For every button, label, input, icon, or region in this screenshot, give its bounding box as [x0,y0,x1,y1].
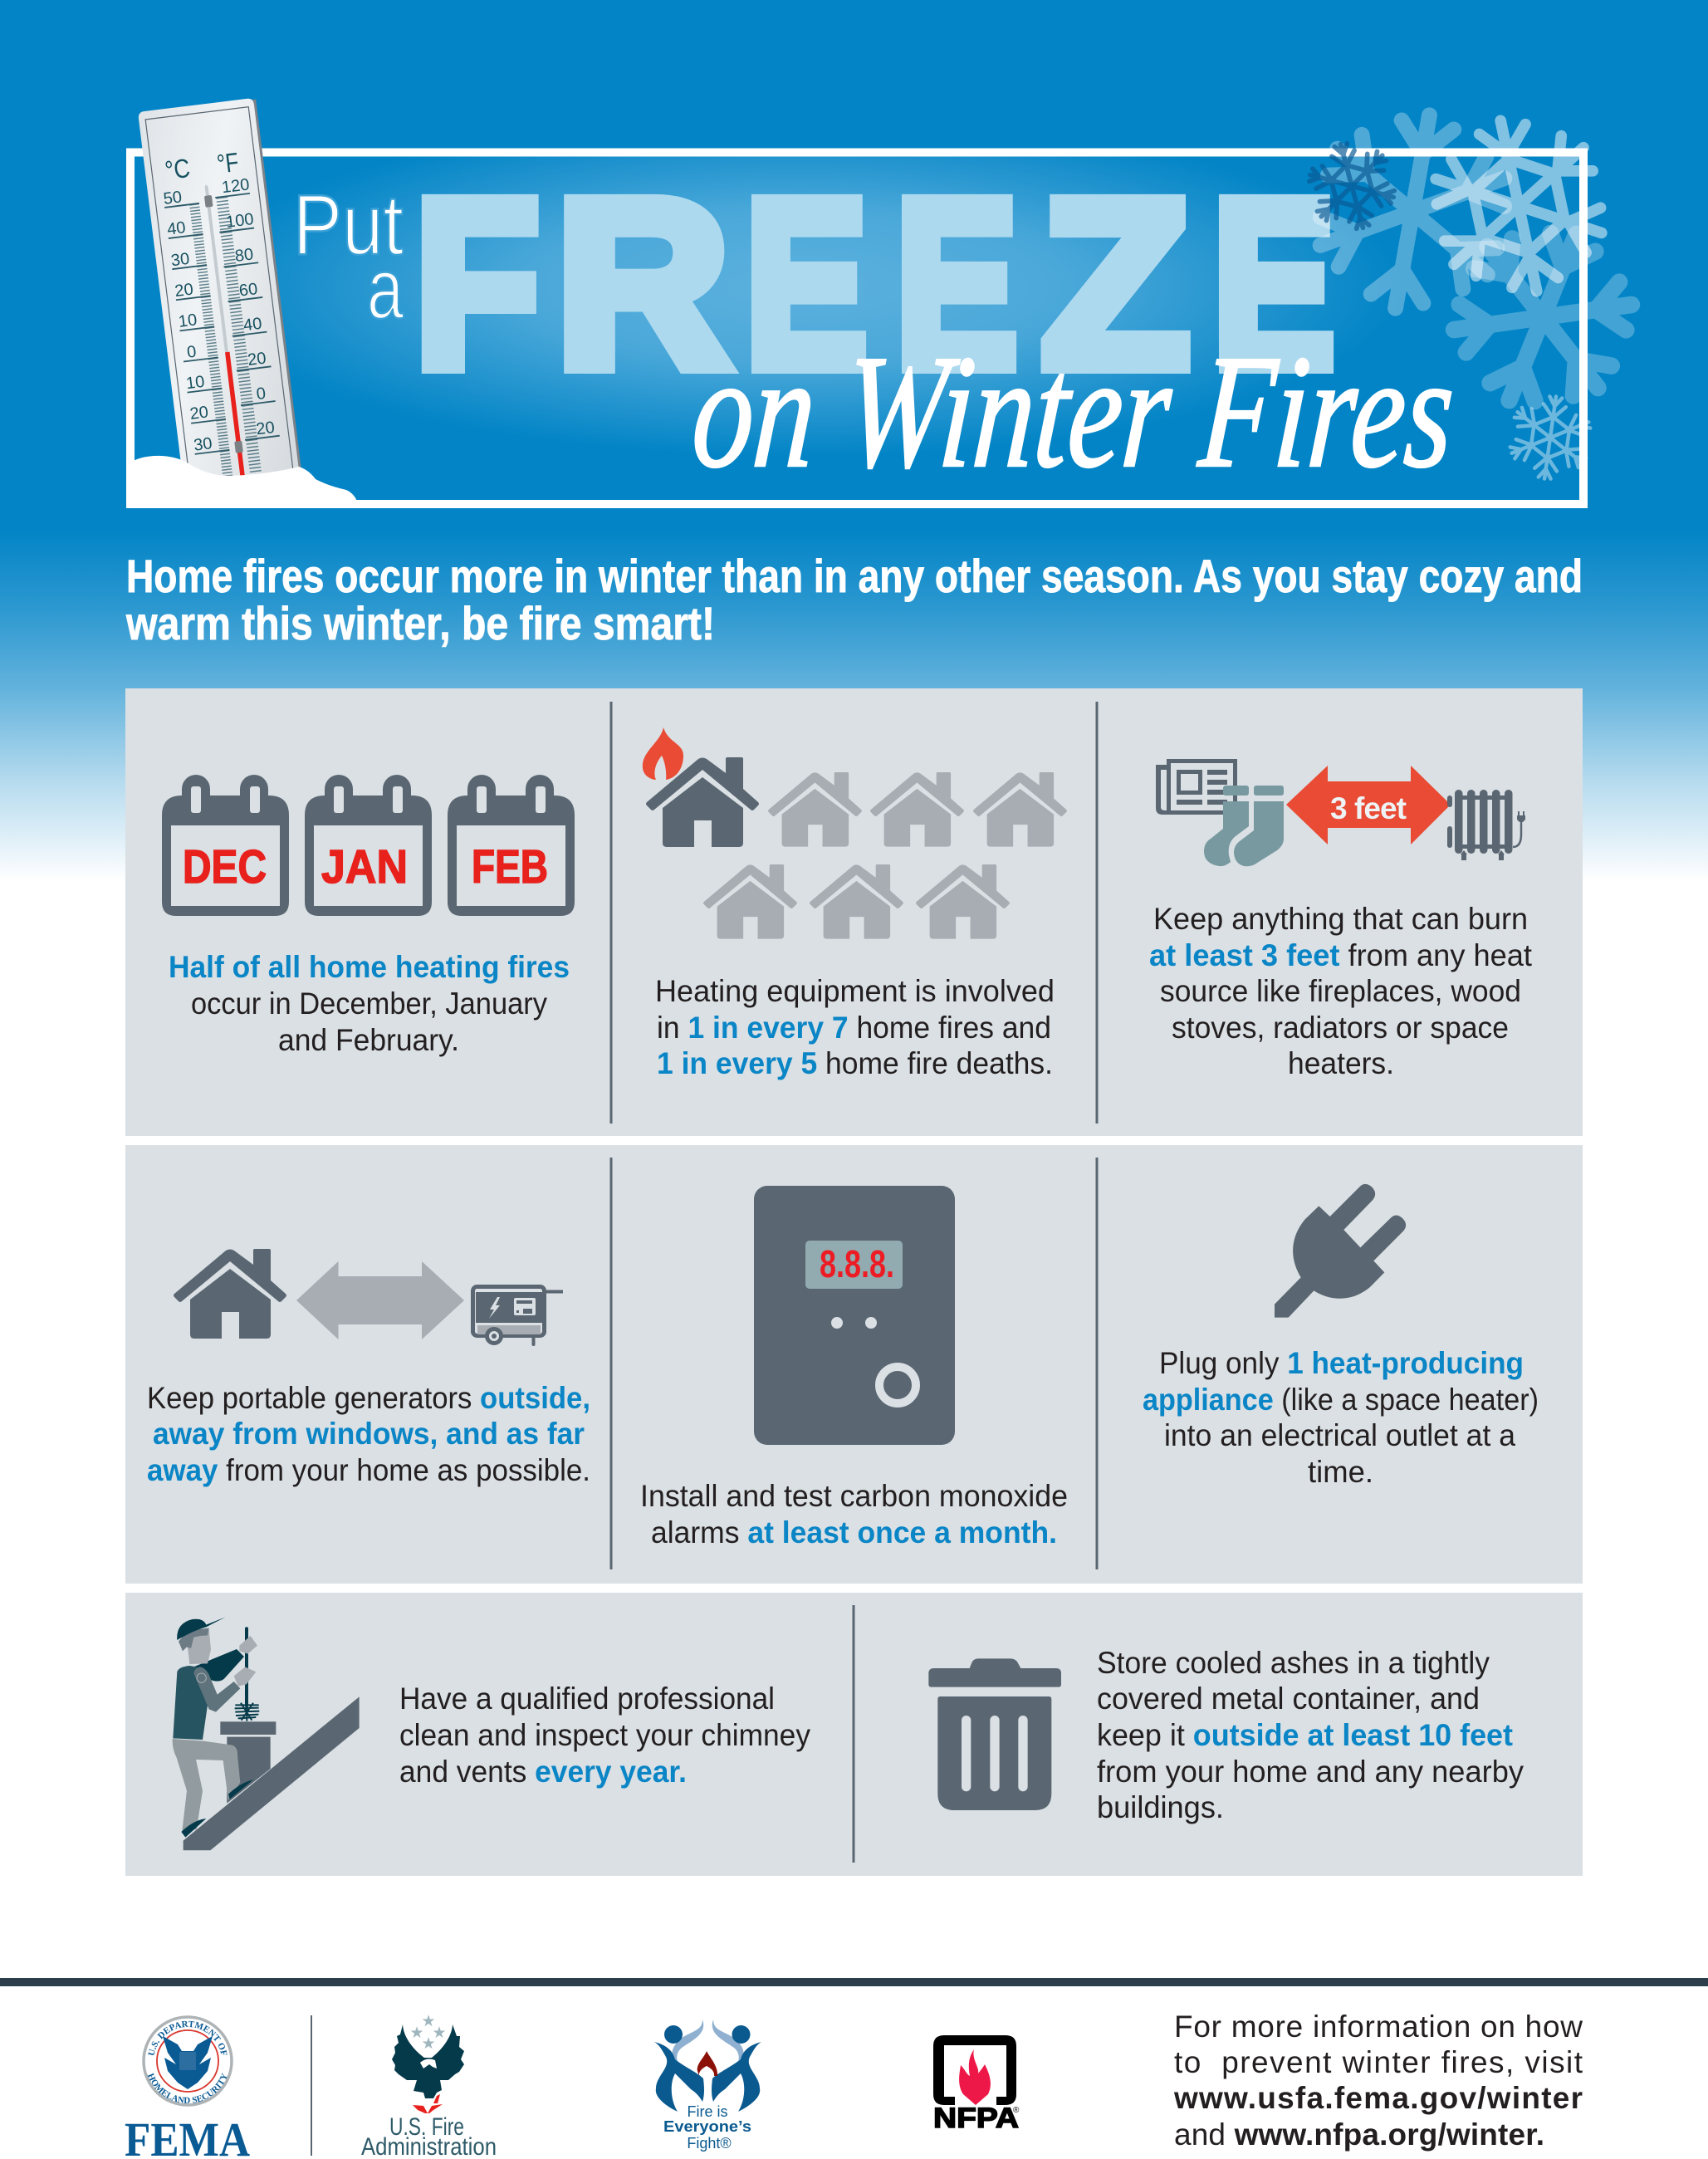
thermometer: 20 [188,403,209,423]
logo: FEMA: U.S. DEPARTMENT OF [148,2021,228,2055]
text: keep 3 feet: heaters. [1288,1046,1394,1080]
icon: carbon monoxide alarm: 8.8.8. [820,1242,894,1285]
logo: FEMA: HOMELAND SECURITY [148,2073,228,2103]
icon: generator [473,1287,563,1346]
thermometer: 10 [178,311,198,331]
thermometer: 0 [186,343,198,362]
text: ashes: buildings. [1097,1790,1224,1824]
thermometer: 120 [221,175,251,197]
banner frame [130,153,1583,504]
logo: U.S. Fire Administration: ★ [421,2013,436,2030]
thermometer: 10 [185,373,206,393]
text: chimney [399,1682,810,1789]
text: more information: and www.nfpa.org/winter. [1174,2117,1544,2152]
text: keep 3 feet: Keep anything that can burn [1153,902,1528,936]
logo: Fire is Everyone's Fight: Fight® [687,2135,732,2152]
icon: chimney sweep [173,1617,360,1850]
icon: calendars: FEB [472,840,548,893]
icon: trash can [928,1658,1061,1810]
intro text [125,550,1583,649]
icon: carbon monoxide alarm [754,1186,955,1445]
panel: row 2 [125,1145,1583,1584]
text: CO alarm [640,1479,1068,1549]
text: half of all fires: Half of all home heating fires [169,950,570,984]
logo: NFPA [933,2035,1020,2134]
text: keep 3 feet: stoves, radiators or space [1172,1011,1509,1045]
text: plug: Plug only 1 heat-producing [1159,1346,1524,1380]
text: plug [1143,1346,1539,1489]
logo: U.S. Fire Administration [361,2013,497,2159]
text: more information [1173,2010,1583,2152]
thermometer: 30 [170,250,190,270]
thermometer: 20 [247,349,267,370]
thermometer: 50 [163,188,183,208]
divider between logos [311,2015,312,2156]
logo: FEMA [125,2015,250,2159]
text: CO alarm: alarms at least once a month. [651,1515,1057,1549]
thermometer: 20 [174,281,194,301]
text: plug: appliance (like a space heater) [1143,1383,1539,1417]
text: more information: to prevent winter fires, visit [1174,2045,1583,2079]
panel: houses [643,727,1067,1080]
title word FREEZE: E [1213,152,1334,416]
arrow: distance [296,1261,464,1339]
title word FREEZE: E [746,152,867,416]
logo: NFPA: NFPA [933,2103,1019,2134]
footer bar [0,1978,1708,1986]
title script on Winter Fires: on Winter Fires [688,322,1460,502]
text: plug: time. [1308,1455,1373,1489]
logo: U.S. Fire Administration: ★ [421,2035,436,2053]
panel: row 1 [125,688,1583,1136]
text: ashes: keep it outside at least 10 feet [1097,1718,1513,1752]
text: keep 3 feet: at least 3 feet from any heat [1149,938,1533,972]
icon: houses [643,727,1067,939]
thermometer: 0 [256,384,267,404]
logo: U.S. Fire Administration: ★ [409,2024,424,2042]
panel: row 3 [125,1593,1583,1876]
logo: Fire is Everyone's Fight [654,2019,761,2152]
panel: 3 feet [1149,759,1533,1080]
title word FREEZE: F [415,152,539,416]
thermometer: 20 [255,419,276,438]
text: ashes: covered metal container, and [1097,1682,1480,1716]
snow [126,456,358,504]
logo: Fire is Everyone's Fight: Everyone’s [663,2118,751,2135]
text: half of all fires: and February. [278,1023,459,1057]
panel: plug [1143,1184,1539,1489]
icon: calendars: JAN [321,840,408,893]
title words Put a [293,177,404,336]
panel: chimney [173,1617,810,1850]
intro text: warm this winter, be fire smart! [125,597,715,649]
thermometer: 100 [225,210,255,232]
logo: U.S. Fire Administration: ★ [432,2024,447,2042]
thermometer: 40 [166,218,187,239]
panel: calendars [162,775,575,1057]
thermometer: °F [215,147,240,179]
text: generators: away from your home as possible. [147,1453,590,1487]
icon: newspaper [1156,759,1237,815]
panel: generators [147,1249,590,1487]
thermometer [138,98,304,503]
text: generators: away from windows, and as far [153,1417,585,1451]
thermometer: 80 [234,245,254,266]
thermometer: 60 [238,280,259,301]
icon: flame [643,727,683,780]
title word FREEZE: Z [1042,152,1189,416]
thermometer: °C [164,153,192,185]
text: heating equipment: in 1 in every 7 home fires and [657,1011,1051,1045]
logo: NFPA: ® [1013,2106,1020,2115]
text: chimney: and vents every year. [399,1755,687,1789]
text: chimney: Have a qualified professional [399,1682,775,1716]
text: half of all fires [169,950,570,1057]
icon: calendars: DEC [183,840,267,893]
text: generators: Keep portable generators outside, [147,1381,590,1415]
text: ashes: Store cooled ashes in a tightly [1097,1646,1490,1680]
arrow: 3 feet [1286,766,1451,845]
text: chimney: clean and inspect your chimney [399,1718,810,1752]
title word FREEZE: R [556,152,729,416]
logo: Fire is Everyone's Fight: Fire is [688,2103,727,2120]
title word FREEZE: E [896,152,1017,416]
logo: U.S. Fire Administration: U.S. Fire [389,2113,464,2141]
text: ashes [1097,1646,1524,1824]
title words Put a: a [367,241,404,336]
text: keep 3 feet [1149,902,1533,1080]
background gradient [0,0,1708,882]
panel: ashes [928,1646,1524,1824]
text: keep 3 feet: source like fireplaces, wood [1160,974,1521,1008]
icon: calendars [162,775,575,916]
text: more information: www.usfa.fema.gov/winter [1173,2081,1583,2115]
text: heating equipment: Heating equipment is involved [655,974,1055,1008]
icon: radiator [1447,790,1525,860]
panel: CO alarm [640,1186,1068,1549]
text: heating equipment [655,974,1055,1080]
text: more information: For more information on how [1174,2010,1583,2044]
header banner [126,98,1660,504]
icon: socks [1204,786,1284,866]
text: half of all fires: occur in December, January [191,986,547,1021]
text: CO alarm: Install and test carbon monoxide [640,1479,1068,1513]
text: generators [147,1381,590,1487]
thermometer: 30 [193,434,213,455]
text: ashes: from your home and any nearby [1097,1755,1524,1789]
snowflakes [1299,98,1660,484]
arrow: 3 feet: 3 feet [1330,791,1407,825]
text: plug: into an electrical outlet at a [1164,1418,1515,1452]
banner glow [272,156,1366,447]
title words Put a: Put [293,177,404,272]
icon: house [174,1249,286,1339]
text: heating equipment: 1 in every 5 home fire deaths. [657,1046,1053,1080]
icon: plug [1275,1184,1406,1318]
thermometer: 40 [242,315,263,335]
